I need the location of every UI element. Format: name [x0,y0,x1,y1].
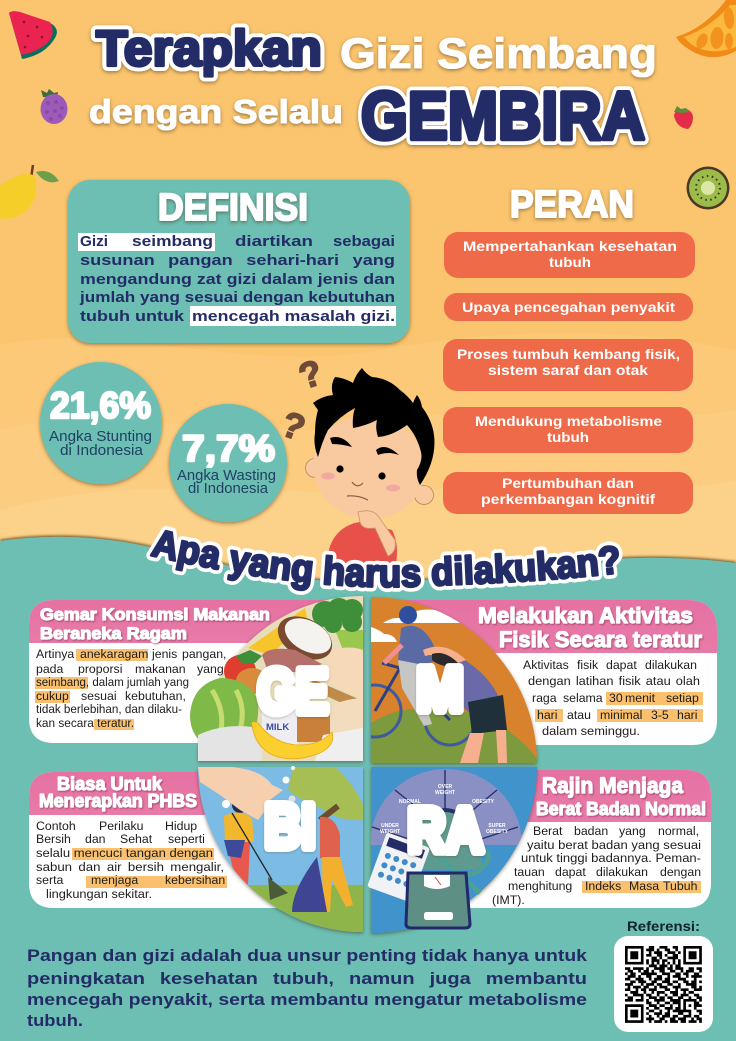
closing statement: Pangan dan gizi adalah dua unsur penting tidak hanya untuk [27,946,588,965]
body text: kebersihan [165,873,225,887]
body text: Tubuh [663,879,698,893]
quadrant: GE food illustration [190,596,363,761]
quadrant: RA BMI illustration: WEIGHT [435,790,455,796]
body text: sabun dan air bersih mengalir, [36,860,224,874]
quadrant: RA BMI illustration: UNDER [381,823,399,829]
body text: Bersih [36,832,71,846]
hand [358,511,395,556]
body text: anekaragam [80,647,148,661]
quadrant: RA BMI illustration: OBESITY [486,829,509,835]
button: tumbuh kembang: sistem saraf dan otak [488,362,648,378]
heading: definisi: DEFINISI [158,187,308,229]
body text [523,658,700,738]
heading: Rajin Menjaga [542,773,684,798]
highlights [35,649,148,730]
banana [252,722,333,759]
button: tumbuh kembang [443,339,693,391]
quadrant: BI hygiene illustration [198,766,363,932]
highlight [582,881,701,893]
heading [40,605,270,643]
letters: BI [264,792,316,862]
body text: 3-5 [651,708,669,722]
heading [536,773,706,819]
heading: Fisik Secara teratur [499,627,702,652]
body text: minimal [600,708,642,722]
body text: selalu mencuci tangan dengan [36,846,213,860]
body text: dalam seminggu. [542,724,640,738]
icon: question marks [276,351,327,449]
body text: Sehat [120,832,153,846]
potato [236,668,268,694]
body text: menghitung [508,879,572,893]
body text: Berat [533,824,563,838]
quadrant: GE food illustration: MILK [266,722,289,733]
eyebrows [330,437,399,455]
body text: dan [85,832,106,846]
button: metabolisme [443,407,693,453]
body text: tidak berlebihan, dan dilaku- [36,702,182,716]
title: Terapkan: Terapkan [96,20,322,76]
closing statement: mencegah penyakit, serta membantu mengatur metabolisme [27,990,587,1009]
closing statement: tubuh. [27,1011,83,1030]
ground [248,885,363,932]
body text: dengan [660,865,701,879]
letters: M [416,656,464,724]
body text: menit [625,691,656,705]
character: thinking boy [305,368,434,566]
rake [232,813,272,880]
body text: tauan [514,865,545,879]
card: GE text [29,600,340,743]
QR code [614,936,713,1032]
weighing scale [406,873,470,928]
title: Gizi Seimbang: Gizi Seimbang [340,30,657,78]
card: BI text [29,772,300,908]
heading: Biasa Untuk [57,774,163,794]
definition text: diartikan [235,233,313,250]
icon: kiwi [686,166,730,210]
definition text: mengandung zat gizi dalam jenis dan [80,271,395,288]
icon: question marks: ? [276,403,311,449]
heading: Melakukan Aktivitas [478,603,693,628]
hand [198,767,283,820]
tomato [224,655,256,687]
body text: jenis [151,647,177,661]
ears [306,458,434,504]
body text: normal, [658,824,699,838]
title: Terapkan outline: Terapkan [96,20,322,76]
button: kognitif: perkembangan kognitif [481,491,655,507]
body text: Artinya [36,647,74,661]
corn [248,608,308,655]
definition text: tubuh untuk [80,308,185,325]
ground [371,709,540,763]
body text: yang [197,662,224,676]
body text: proporsi [78,662,122,676]
body text: pada [36,662,64,676]
body text: yang [619,824,646,838]
clouds [371,610,460,642]
body text: dapat [606,658,637,672]
body text: dilakukan [596,865,648,879]
stat: stunting [40,362,162,484]
body text: Indeks [585,879,621,893]
label: referensi: Referensi: [627,919,700,934]
panel: definisi [68,180,410,343]
trash bag [292,857,327,912]
body text: Perilaku [99,819,144,833]
bike wheels [371,684,472,746]
eyes [336,465,386,480]
hair [313,368,434,485]
heading: Berat Badan Normal [536,799,706,819]
shirt [328,522,397,566]
woman [232,804,244,813]
title [89,20,657,154]
stat: wasting: Angka Wasting [177,468,276,484]
highlights [72,848,227,888]
button: pencegahan [444,293,693,321]
body text: Aktivitas [523,658,569,672]
milk carton [262,700,298,750]
icon: blackberry [40,89,68,124]
body text: badan [574,824,608,838]
body text: 30 [609,691,623,705]
body text [492,824,701,907]
heading: Beraneka Ragam [40,624,187,643]
body text: serta [36,873,63,887]
button: metabolisme: Mendukung metabolisme [475,413,662,429]
quadrant: M activity illustration [349,597,540,763]
heading: Menerapkan PHBS [39,791,197,811]
highlight: gizi seimbang [78,233,215,251]
heading: Gemar Konsumsi Makanan [40,605,270,624]
definition text: Gizi [80,233,108,250]
quadrant: RA BMI illustration [367,767,537,933]
highlight: mencegah masalah gizi [190,306,396,326]
cloth and rice [198,726,262,761]
body text [36,647,226,730]
body text: dilakukan [645,658,697,672]
icon: strawberry [674,106,693,129]
body text: pangan, [182,647,226,661]
definition text: sebagai [333,233,395,250]
heading [478,603,702,652]
bread [325,648,363,700]
title: GEMBIRA outline: GEMBIRA [361,78,645,154]
body text: seperti [168,832,205,846]
heading [39,774,197,811]
letters: GE [258,658,328,726]
quadrant: RA BMI illustration: WEIGHT [380,829,400,835]
closing statement: peningkatan kesehatan tubuh, namun juga membantu [27,969,587,988]
measuring tape [440,849,488,893]
face [305,406,433,528]
letters: RA [408,796,484,866]
quadrant: RA BMI illustration: SUPER [488,823,506,829]
definition text: susunan pangan sehari-hari yang [80,252,395,269]
body text: yaitu berat badan yang sesuai [527,838,701,852]
body text: menjaga [91,873,138,887]
heading overlay: Apa yang harus dilakukan? [150,530,619,592]
definition text: mencegah masalah gizi. [192,308,395,325]
button: kesehatan: Mempertahankan kesehatan [463,238,677,254]
button: kesehatan [444,232,695,278]
body text: cukup [36,689,69,703]
title: dengan Selalu: dengan Selalu [89,93,343,130]
button: kesehatan: tubuh [549,254,591,270]
icon: pear [0,165,59,219]
meat [262,649,322,672]
calculator [367,832,430,902]
stat: wasting: di Indonesia [188,481,269,497]
icon: orange slice [676,0,736,57]
highlights [535,692,703,722]
heading: peran: PERAN [510,184,634,226]
stretching man [456,660,498,712]
body text: untuk tinggi badannya. Peman- [521,851,701,865]
man [320,817,340,858]
peran list [443,232,695,514]
body text: Masa [629,879,659,893]
heading: apa yang harus dilakukan: Apa yang harus dilakukan? [146,526,622,595]
stat: stunting: di Indonesia [60,443,144,459]
definition text: jumlah yang sesuai dengan kebutuhan [79,289,395,306]
button: kognitif [443,472,693,514]
body text: lingkungan sekitar. [46,887,152,901]
lettuce [190,678,258,745]
icon: watermelon [9,11,57,59]
body text: kan secara teratur. [36,716,134,730]
soap bubbles [222,766,296,808]
stat: wasting [169,404,287,522]
body text [36,819,225,901]
cheeks [321,472,400,492]
icon: question marks: ? [294,351,327,397]
teal wave background [0,537,736,1041]
button: pencegahan: Upaya pencegahan penyakit [462,299,675,315]
body text: hari [537,708,558,722]
quadrant: RA BMI illustration: NORMAL [399,799,421,805]
body text: atau [567,708,591,722]
body text: Hidup [165,819,197,833]
body text: makanan [135,662,186,676]
stat: stunting: Angka Stunting [49,429,152,445]
button: kognitif: Pertumbuhan dan [502,475,634,491]
body text: fisik [577,658,599,672]
title: GEMBIRA: GEMBIRA [361,78,645,154]
body text: raga [532,691,557,705]
button: tumbuh kembang: Proses tumbuh kembang fisik, [457,346,680,362]
coconut [270,608,340,668]
card: M text [400,600,717,745]
body text: (IMT). [492,893,525,907]
body text: dapat [555,865,586,879]
body text: sesuai [81,689,117,703]
body text: selama [563,691,603,705]
definition text: seimbang [132,233,213,250]
body text: dengan latihan fisik atau olah [528,674,700,688]
body text: Contoh [36,819,76,833]
definition text [79,233,395,325]
body text: hari [677,708,698,722]
cauliflower greens [335,630,363,655]
quadrant: RA BMI illustration: OBESITY [472,799,495,805]
quadrant: RA BMI illustration: OVER [438,784,452,790]
body text: kebutuhan, [125,689,186,703]
body text: setiap [666,691,699,705]
stat: stunting: 21,6% [50,385,151,426]
closing statement [27,946,588,1030]
gauge [370,769,522,845]
broccoli [312,598,363,633]
body text: seimbang, dalam jumlah yang [36,675,189,689]
cyclist [399,606,417,624]
tree [288,767,363,820]
nose and mouth [347,482,368,500]
button: metabolisme: tubuh [547,429,589,445]
card: RA text [450,770,711,908]
stat: wasting: 7,7% [182,428,275,469]
